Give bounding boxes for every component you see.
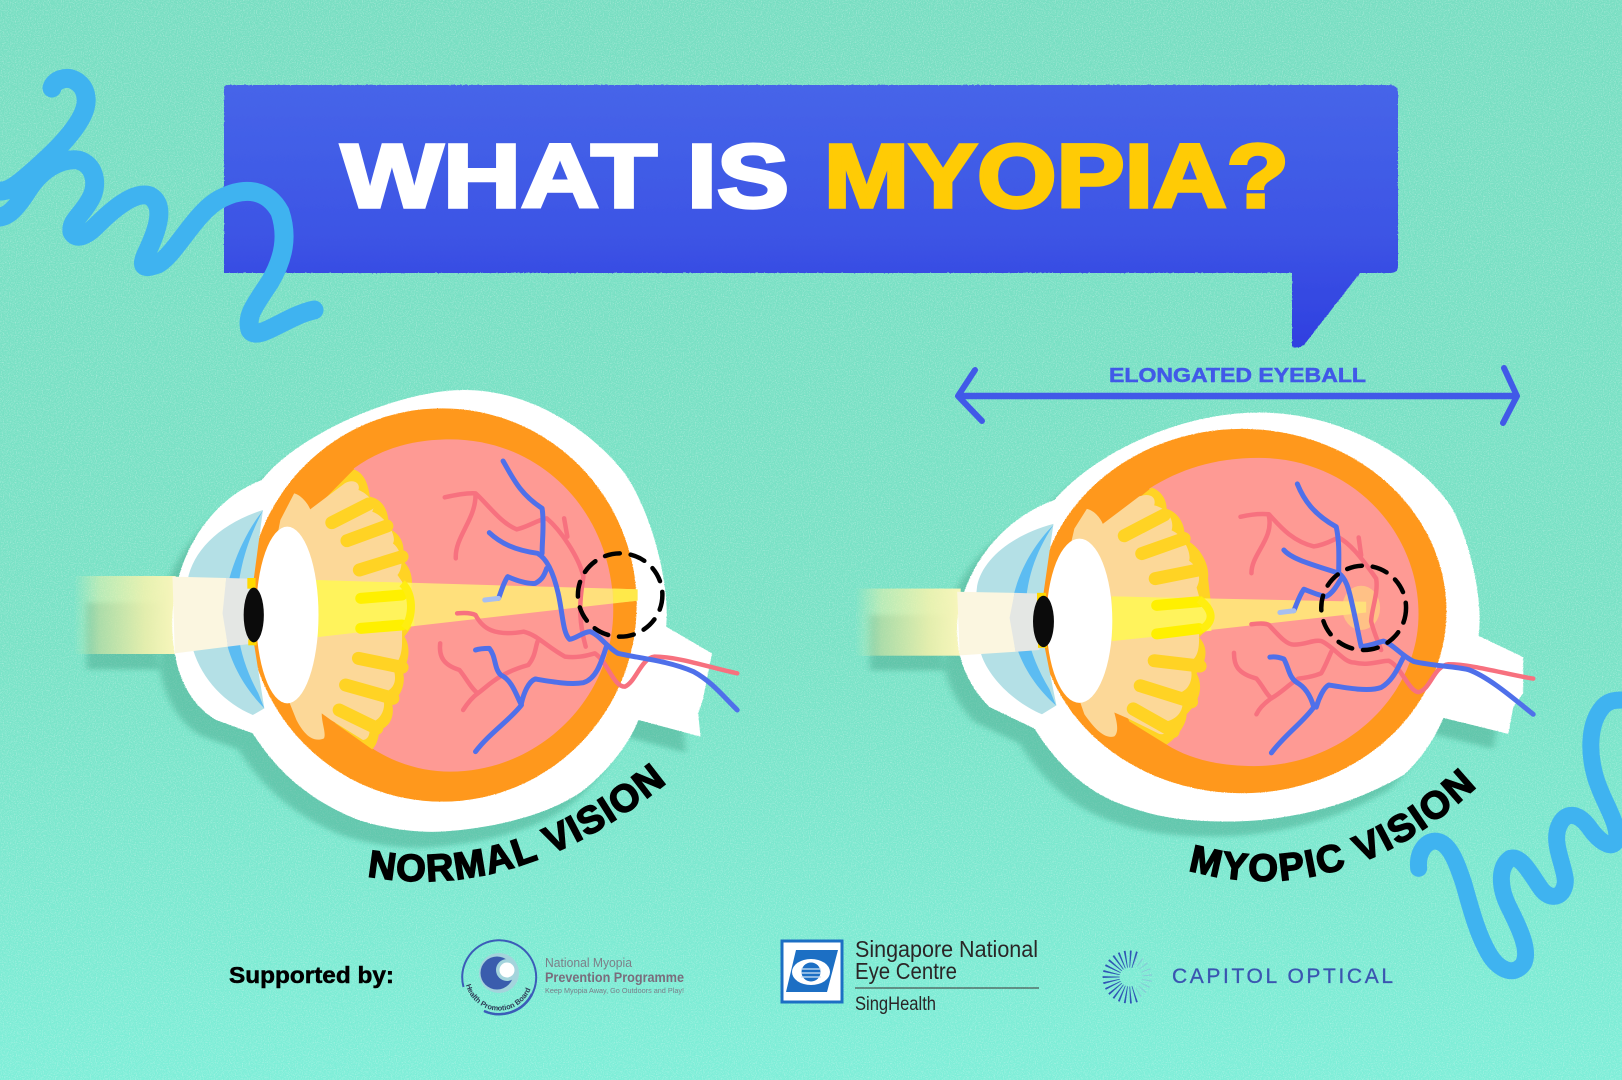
logo: national myopia prevention programme: Keep Myopia Away, Go Outdoors and Play!: [545, 988, 684, 995]
logo: national myopia prevention programme: Health Promotion Board: [466, 984, 530, 1011]
retinal arteries: [440, 493, 737, 710]
title text: MYOPIA?: [824, 127, 1289, 227]
label: myopic vision: MYOPIC VISION: [1189, 768, 1476, 882]
logo: national myopia prevention programme: Prevention Programme: [545, 970, 684, 985]
pupil: [1033, 596, 1054, 647]
logo: singapore national eye centre: Singapore National: [855, 936, 1038, 962]
logo: capitol optical: CAPITOL OPTICAL: [1172, 965, 1393, 988]
lens: [256, 527, 318, 703]
dashed circle: focus point: [1321, 566, 1406, 650]
logo: national myopia prevention programme: [461, 939, 684, 1016]
pupil: [244, 588, 264, 642]
eye: normal vision: [74, 390, 737, 848]
ciliary yellow: [1104, 487, 1213, 745]
retinal veins: [476, 461, 737, 752]
cornea: [172, 510, 264, 715]
squiggle: bottom right: [1418, 700, 1622, 971]
sclera white outline: [172, 390, 712, 832]
logo: singapore national eye centre: Eye Centre: [855, 958, 957, 984]
ciliary cream: [1064, 495, 1199, 737]
title text: WHAT IS: [341, 127, 789, 227]
elongated eyeball arrow: [957, 365, 1518, 423]
beam: outside eye: [855, 589, 961, 656]
dashed circle: focus point: [578, 553, 662, 637]
squiggle: top left: [0, 78, 314, 333]
supported by text: Supported by:: [229, 962, 394, 988]
logo: singapore national eye centre: SingHealth: [855, 994, 936, 1015]
sclera white outline: [957, 412, 1523, 822]
label: normal vision: NORMAL VISION: [368, 762, 666, 882]
retinal veins: [1270, 484, 1533, 753]
cornea: [957, 524, 1056, 714]
ciliary cream: [271, 481, 402, 740]
lens: [1046, 539, 1112, 703]
choroid orange ring: [247, 408, 637, 802]
ciliary yellow: [308, 469, 414, 749]
retina pink: [1149, 458, 1419, 766]
beam: outside eye: [74, 576, 176, 654]
logo: capitol optical: [1111, 959, 1393, 995]
retina pink: [354, 439, 613, 772]
choroid orange ring: [1037, 429, 1446, 793]
elongated eyeball arrow: ELONGATED EYEBALL: [1109, 365, 1366, 387]
logo: national myopia prevention programme: National Myopia: [545, 956, 632, 970]
light beam inside eye: [315, 580, 638, 637]
logo: singapore national eye centre: [782, 936, 1039, 1015]
light beam inside eye: [1112, 586, 1380, 641]
eye: myopic vision: [855, 412, 1533, 837]
title text: [341, 127, 1289, 227]
title speech bubble: [224, 85, 1398, 348]
retinal arteries: [1234, 514, 1533, 714]
